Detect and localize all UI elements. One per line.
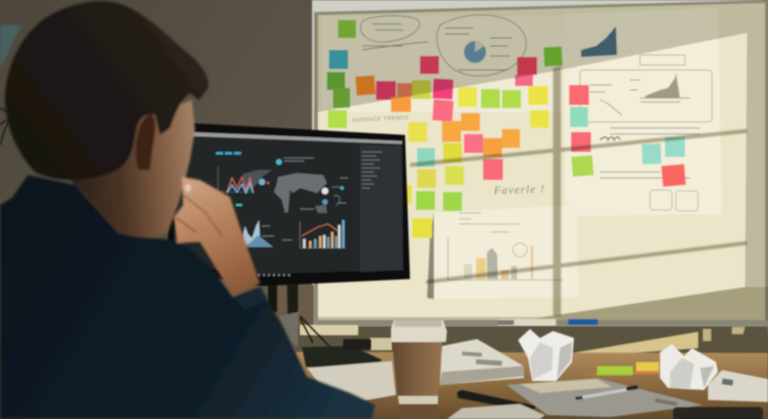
board note: left label: SURFACE TRENDS [352,115,409,124]
shadow: lower right of board [500,287,768,326]
crumpled paper ball left [518,329,574,381]
right paper [708,370,768,402]
sleeve cuff [233,287,268,310]
desk device [343,339,371,350]
poster on far wall [0,25,22,66]
hand [174,177,260,296]
taskbar icons [258,274,292,276]
whiteboard tray and markers [314,319,768,326]
monitor [168,123,410,347]
shirt and shoulders [0,175,375,419]
pen [575,385,638,400]
paper: right sheet with area chart [562,8,722,216]
world map [243,170,327,213]
dashboard header chips [216,152,241,154]
dashboard area chart [240,220,292,247]
coffee cup [391,320,447,419]
notebook edge [457,390,536,412]
keyboard [302,346,382,368]
monitor bezel [168,123,410,286]
sunlight patch on wall [573,332,698,356]
wall below board [270,285,314,355]
side panel list [362,152,382,188]
dashboard line chart [218,166,253,193]
bottom paper [447,404,545,419]
board frame [314,0,768,326]
dashboard bar chart [300,220,346,248]
wall strip below tray [296,326,768,360]
front document [507,378,703,417]
screen top highlight [188,132,402,144]
paper: top left sketches [322,15,562,112]
shadow: window light cast on board [312,0,768,330]
desk items [302,320,768,419]
map markers [259,159,344,205]
map captions [284,158,348,209]
ear [136,114,155,170]
crumpled paper ball right [660,344,718,390]
paper: lower chart sheet [427,205,579,299]
shadow: window mullions [410,66,747,316]
legend chips [236,204,242,206]
whiteboard [312,0,768,330]
hair [5,1,208,180]
dark object on desk [673,407,763,419]
neck and face [60,100,195,238]
sticky pads on desk [585,362,659,376]
middle paper stack [440,339,524,385]
person viewed from behind [0,1,375,419]
board surface [318,3,765,320]
handwritten board heading: Faverle ! [493,183,545,197]
sticky notes [327,20,686,238]
lower wall and desk edge [270,285,768,419]
left paper stack [307,361,396,401]
screen side panel [360,145,403,272]
plant leaves [0,108,10,145]
monitor screen [172,133,403,274]
monitor stand [268,284,330,347]
desk surface [296,352,768,419]
